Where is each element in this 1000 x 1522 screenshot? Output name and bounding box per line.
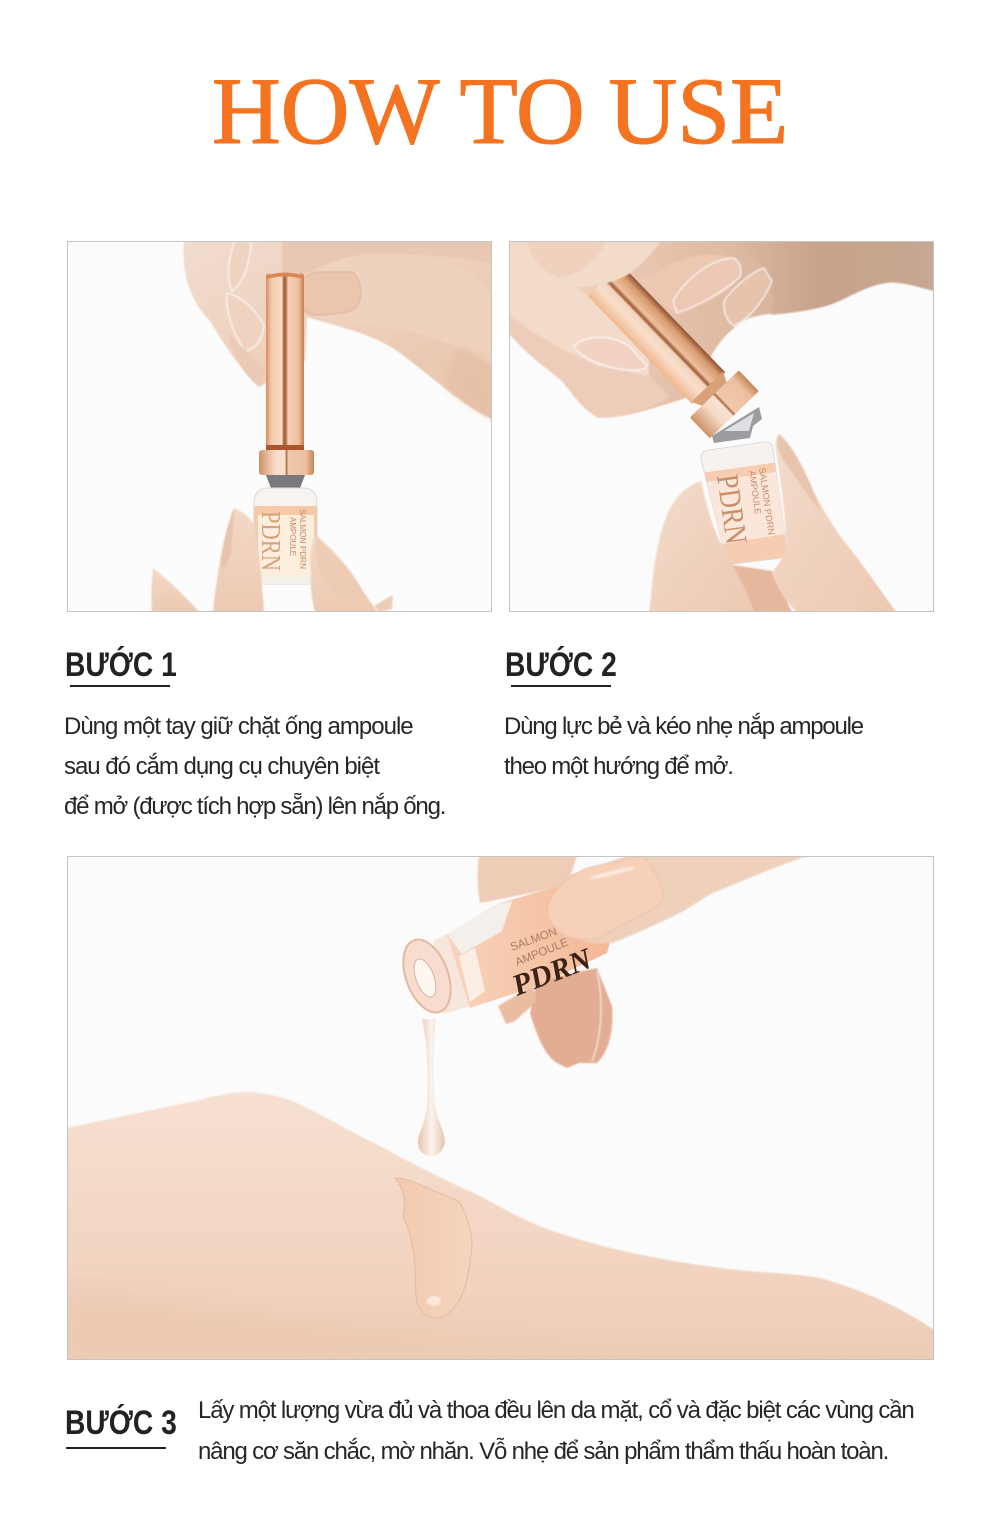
thumb [547, 856, 807, 943]
nail: finger 1 [229, 241, 251, 291]
tool [580, 257, 762, 443]
panel: step 3 photo [67, 856, 934, 1360]
ampoule: SALMON [509, 926, 559, 954]
underline: step 2 [511, 685, 611, 687]
heading: step 1: BƯỚC 1 [65, 646, 177, 684]
gel on skin [395, 1178, 472, 1318]
heading: step 2: BƯỚC 2 [505, 646, 617, 684]
nail: middle finger [574, 337, 647, 370]
arm [67, 1092, 934, 1360]
vial [701, 442, 789, 567]
nail: little finger [724, 268, 772, 326]
nail: finger 3 [229, 333, 265, 387]
text: step 1: sau đó cắm dụng cụ chuyên biệt [64, 753, 379, 780]
text: step 2: theo một hướng để mở. [504, 753, 733, 780]
tool and vial: AMPOULE [288, 517, 297, 556]
nail: finger 2 [227, 293, 264, 351]
falling drop [418, 1019, 445, 1156]
ampoule [394, 886, 617, 1019]
vial: SALMON PDRN [757, 467, 776, 536]
nail: ring finger [673, 258, 741, 313]
lower fingers [498, 968, 612, 1068]
ampoule: AMPOULE [514, 936, 571, 969]
underline: step 3 [66, 1447, 166, 1449]
title: HOW TO USE [212, 58, 788, 164]
text: step 3: nâng cơ săn chắc, mờ nhăn. Vỗ nhẹ để sản phẩm thẩm thấu hoàn toàn. [198, 1438, 888, 1464]
tool and vial: SALMON PDRN [298, 509, 307, 569]
text: step 2: Dùng lực bẻ và kéo nhẹ nắp ampoule [504, 713, 863, 740]
vial: AMPOULE [747, 470, 763, 515]
tool and vial [254, 272, 317, 584]
heading: step 3: BƯỚC 3 [65, 1404, 177, 1442]
underline: step 1 [70, 685, 170, 687]
text: step 1: Dùng một tay giữ chặt ống ampoule [64, 713, 413, 740]
ampoule: PDRN [507, 942, 597, 1003]
text: step 3 [198, 1397, 914, 1464]
text: step 1: để mở (được tích hợp sẵn) lên nắp ống. [64, 793, 445, 820]
panel: step 1 photo [67, 241, 492, 612]
tool and vial: PDRN [256, 511, 286, 571]
text: step 2 [504, 712, 864, 780]
back finger [478, 856, 577, 903]
text: step 1 [64, 713, 445, 820]
lower fingers [649, 434, 896, 612]
upper hand [509, 241, 934, 418]
lower fingers [151, 508, 393, 612]
thumb over tool [526, 241, 661, 287]
text: step 3: Lấy một lượng vừa đủ và thoa đều lên da mặt, cổ và đặc biệt các vùng cần [198, 1397, 914, 1424]
panel: step 2 photo [509, 241, 934, 612]
upper hand [184, 241, 492, 419]
vial: PDRN [710, 472, 754, 546]
nail: thumb [299, 272, 361, 315]
